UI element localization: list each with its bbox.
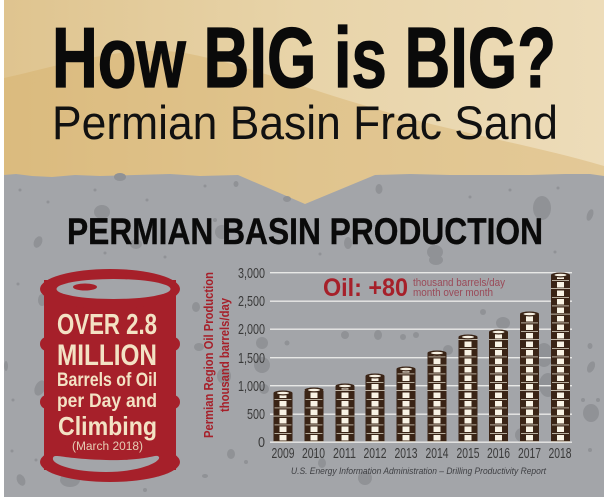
- x axis labels: 2018: [548, 446, 572, 462]
- x axis labels: 2015: [456, 446, 480, 462]
- barrel text: Climbing: [58, 411, 157, 441]
- sand background: [4, 0, 604, 210]
- oil growth callout: thousand barrels/day: [413, 277, 505, 289]
- y axis labels: 0: [258, 435, 265, 451]
- x axis labels: 2011: [333, 446, 356, 462]
- section heading: PERMIAN BASIN PRODUCTION: [67, 211, 543, 252]
- barrel text: [57, 309, 157, 453]
- grid lines: [270, 272, 572, 443]
- barrel text: Barrels of Oil: [57, 369, 157, 391]
- rock ground background: [4, 173, 604, 497]
- bar chart: [238, 266, 572, 462]
- x axis labels: 2009: [272, 446, 294, 462]
- y axis labels: 500: [247, 407, 265, 423]
- x axis labels: 2013: [394, 446, 418, 462]
- y axis labels: 1,500: [238, 351, 265, 367]
- x axis labels: 2014: [426, 446, 448, 462]
- oil growth callout: month over month: [413, 287, 493, 299]
- y axis labels: 2,500: [238, 294, 265, 310]
- barrel stacks: [274, 272, 570, 442]
- x axis labels: 2012: [364, 446, 386, 462]
- barrel lid: [56, 279, 170, 299]
- y axis labels: [238, 266, 265, 451]
- barrel text: MILLION: [57, 339, 157, 372]
- barrel shape: [40, 269, 180, 482]
- x axis labels: 2016: [487, 446, 510, 462]
- source note: U.S. Energy Information Administration – Drilling Productivity Report: [291, 466, 546, 477]
- y axis labels: 2,000: [238, 322, 265, 338]
- barrel text: OVER 2.8: [57, 309, 157, 341]
- oil growth callout: Oil: +80: [323, 274, 408, 302]
- barrel text: (March 2018): [72, 441, 143, 453]
- barrel text: per Day and: [57, 390, 157, 412]
- oil growth callout: [323, 274, 505, 302]
- x axis labels: 2010: [302, 446, 325, 462]
- barrel bottom slit: [53, 456, 159, 472]
- subtitle: Permian Basin Frac Sand: [52, 96, 558, 149]
- y axis labels: 3,000: [238, 266, 265, 282]
- y axis labels: 1,000: [238, 379, 265, 395]
- axis title: Permian Region Oil Production: [202, 272, 216, 438]
- axis title: thousand barrels/day: [218, 298, 232, 412]
- x axis labels: 2017: [518, 446, 541, 462]
- axis title: [202, 272, 232, 438]
- oil barrel callout: [40, 269, 180, 482]
- x axis labels: [272, 446, 572, 462]
